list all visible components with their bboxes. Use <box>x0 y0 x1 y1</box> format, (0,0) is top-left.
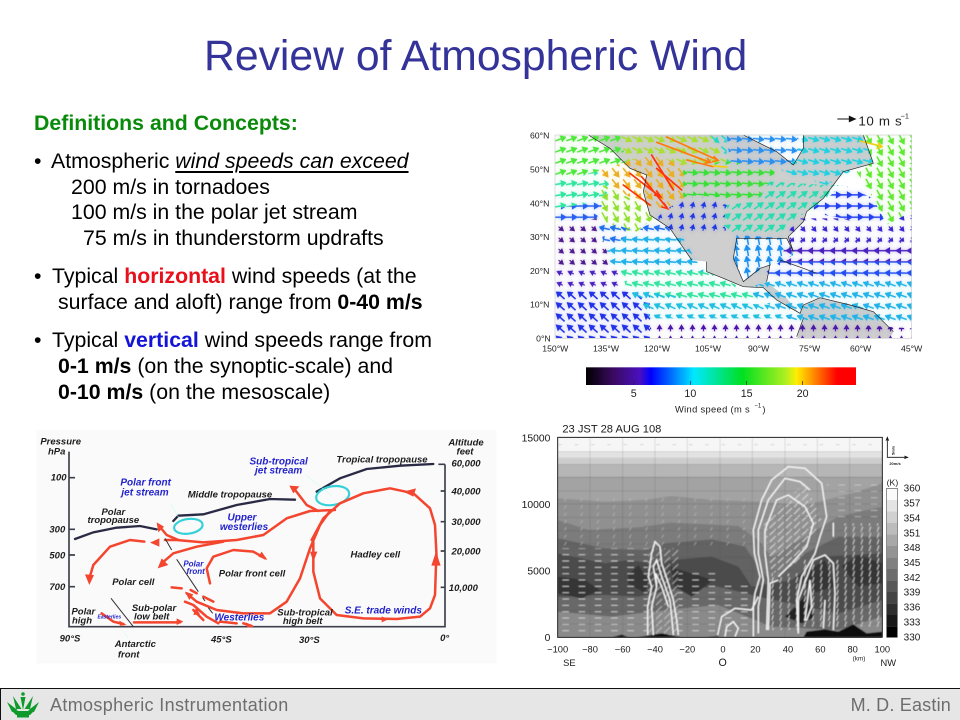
heading: definitions: Definitions and Concepts: <box>34 111 298 135</box>
bullet: vertical wind: Typical vertical wind speeds range from <box>52 328 432 352</box>
blue labels: Sub-tropical <box>249 457 308 468</box>
bullet: horizontal wind: Typical horizontal wind speeds (at the <box>52 264 417 288</box>
tropopause lines <box>75 464 433 539</box>
longitude labels: 135°W <box>593 344 620 354</box>
black labels: Polar cell <box>112 577 155 588</box>
x axis labels: NW <box>881 658 896 668</box>
colour wash under the vectors <box>555 135 912 338</box>
footer bar <box>0 688 960 720</box>
colour bar: wind speed: Wind speed (m s <box>675 404 750 414</box>
text block: definitions and concepts <box>34 111 432 404</box>
black labels: low belt <box>134 611 170 622</box>
latitude labels: 10°N <box>530 300 549 310</box>
x axis labels: 100 <box>875 645 890 655</box>
x axis labels <box>547 645 896 669</box>
bullet: vertical wind: • <box>34 328 41 352</box>
black labels: 100 <box>51 473 67 484</box>
colour bar: wind speed: 10 <box>684 388 696 400</box>
temperature colour scale: 345 <box>904 558 921 569</box>
colour bar: wind speed: 5 <box>631 388 637 400</box>
longitude labels <box>542 344 923 354</box>
temperature colour scale <box>887 477 921 644</box>
vector scale key: 5m/s <box>890 445 895 455</box>
temperature colour scale: 360 <box>904 483 921 494</box>
strong wind arrows <box>623 137 882 209</box>
vector field <box>555 135 912 338</box>
darkest blobs <box>558 555 882 623</box>
front lines <box>111 538 213 627</box>
black labels: 10,000 <box>449 583 479 594</box>
latitude labels: 20°N <box>530 266 549 276</box>
colour bar: wind speed: 15 <box>741 388 753 400</box>
temperature colour scale: 339 <box>904 588 921 599</box>
black labels: 0° <box>440 633 449 644</box>
bullet: wind speeds can exceed: • <box>34 149 41 173</box>
blue labels: Easterlies <box>98 615 121 621</box>
black labels: Polar front cell <box>219 569 286 580</box>
vector scale key <box>886 437 908 466</box>
x axis labels: −100 <box>547 645 568 655</box>
latitude labels: 60°N <box>530 130 549 140</box>
black labels: Altitude <box>447 437 484 448</box>
shaded potential temperature <box>558 437 882 638</box>
black labels: Hadley cell <box>351 550 401 561</box>
wind vectors <box>558 445 882 636</box>
circulation arrows <box>89 488 437 626</box>
longitude labels: 105°W <box>695 344 722 354</box>
y axis labels <box>522 433 551 644</box>
line: horizontal range: surface and aloft) range from 0-40 m/s <box>58 290 423 314</box>
colour bar: wind speed: −1 <box>754 404 762 410</box>
black labels: 30°S <box>299 635 320 646</box>
latitude labels: 0°N <box>536 334 551 344</box>
axes <box>69 452 445 627</box>
reference arrow: 10 m/s: 10 m s <box>858 114 902 129</box>
black labels: 300 <box>49 524 66 535</box>
blue labels <box>98 457 422 624</box>
black labels: Sub-polar <box>132 603 177 614</box>
longitude labels: 120°W <box>644 344 671 354</box>
chart: wind vector map <box>530 111 923 414</box>
x axis labels: −20 <box>679 645 695 655</box>
longitude labels: 45°W <box>901 344 923 354</box>
black labels: feet <box>457 446 474 457</box>
lower lighter layers <box>558 586 882 630</box>
blue labels: westerlies <box>220 522 269 533</box>
blue labels: jet stream <box>119 488 169 499</box>
black labels: Polar <box>71 606 97 617</box>
map plot <box>555 135 912 338</box>
blue labels: Upper <box>228 513 258 524</box>
black labels: Middle tropopause <box>188 490 273 501</box>
jet stream ovals <box>173 484 351 536</box>
temperature colour scale: 330 <box>904 633 921 644</box>
blue labels: Polar <box>183 560 204 569</box>
black labels: front <box>118 649 140 660</box>
temperature colour scale: 354 <box>904 513 921 524</box>
y axis labels: 0 <box>545 633 551 644</box>
black labels: Pressure <box>40 437 82 448</box>
longitude labels: 150°W <box>542 344 569 354</box>
temperature colour scale: (K) <box>887 477 898 487</box>
black labels <box>40 437 484 660</box>
x axis labels: 40 <box>783 645 793 655</box>
blue labels: Polar front <box>120 478 172 489</box>
coastlines <box>588 135 893 337</box>
black labels: 45°S <box>210 634 232 645</box>
icon: green lotus logo <box>7 692 39 718</box>
title: Review of Atmospheric Wind <box>204 32 747 80</box>
black labels: 30,000 <box>451 517 481 528</box>
temperature colour scale: 351 <box>904 528 921 539</box>
black labels: Tropical tropopause <box>336 455 428 466</box>
chart: vertical cross-section of storm <box>522 424 921 669</box>
line: thunderstorm updrafts: 75 m/s in thunderstorm updrafts <box>83 226 384 250</box>
black labels: 90°S <box>60 634 81 645</box>
temperature colour scale: 357 <box>904 498 921 509</box>
blue labels: S.E. trade winds <box>345 605 422 616</box>
black labels: Polar <box>101 507 127 518</box>
black labels: 60,000 <box>451 459 481 470</box>
longitude labels: 75°W <box>799 344 821 354</box>
reference arrow: 10 m/s: −1 <box>901 111 909 120</box>
black labels: 700 <box>49 582 66 593</box>
frame <box>558 437 882 637</box>
panel background <box>37 430 497 663</box>
vector scale key: 20m/s <box>889 461 901 466</box>
chart time label: 23 JST 28 AUG 108 <box>562 424 661 436</box>
footer course name: Atmospheric Instrumentation <box>50 695 289 715</box>
line: polar jet: 100 m/s in the polar jet stream <box>71 200 357 224</box>
x axis labels: −60 <box>615 645 631 655</box>
black labels: tropopause <box>87 515 140 526</box>
reflectivity contours <box>648 467 835 637</box>
temperature colour scale: 348 <box>904 543 921 554</box>
colour bar: wind speed <box>586 367 856 414</box>
black labels: Sub-tropical <box>277 607 333 618</box>
y axis labels: 5000 <box>527 567 551 578</box>
reference arrow: 10 m/s <box>837 111 909 129</box>
latitude labels: 50°N <box>530 164 549 174</box>
grid lines <box>558 437 882 637</box>
land masses <box>588 135 893 338</box>
x axis labels: 0 <box>720 645 726 655</box>
longitude labels: 60°W <box>850 344 872 354</box>
blue labels: Westerlies <box>214 613 265 624</box>
temperature colour scale: 342 <box>904 573 921 584</box>
black labels: 20,000 <box>450 547 481 558</box>
arrow heads <box>85 486 441 628</box>
black labels: high <box>72 615 92 626</box>
blue labels: jet stream <box>253 466 302 477</box>
x axis labels: SE <box>563 658 576 668</box>
black labels: high belt <box>283 616 323 627</box>
x axis labels: −80 <box>582 645 598 655</box>
black labels: hPa <box>48 446 65 457</box>
x axis labels: 20 <box>750 645 761 655</box>
bullet: horizontal wind: • <box>34 264 41 288</box>
footer author: M. D. Eastin <box>851 695 951 715</box>
x axis labels: −40 <box>647 645 663 655</box>
latitude labels <box>530 130 551 344</box>
y axis labels: 10000 <box>522 500 551 511</box>
latitude labels: 40°N <box>530 198 549 208</box>
latitude labels: 30°N <box>530 232 549 242</box>
bullet: wind speeds can exceed: Atmospheric wind speeds can exceed <box>51 149 409 173</box>
longitude labels: 90°W <box>748 344 770 354</box>
temperature colour scale: 333 <box>904 618 921 629</box>
colour bar: wind speed: ) <box>762 404 765 414</box>
colour bar: wind speed: 20 <box>797 388 809 400</box>
black labels: 500 <box>49 550 66 561</box>
x axis labels: 80 <box>847 645 858 655</box>
temperature colour scale: 336 <box>904 603 921 614</box>
line: synoptic: 0-1 m/s (on the synoptic-scale) and <box>58 354 393 378</box>
terrain <box>612 624 882 637</box>
y axis labels: 15000 <box>522 433 551 444</box>
x axis labels: 60 <box>815 645 826 655</box>
x axis labels: (km) <box>853 656 865 663</box>
plot border <box>555 135 912 338</box>
chart: general circulation cross-section <box>40 437 484 660</box>
black labels: 40,000 <box>450 486 481 497</box>
black labels: Antarctic <box>114 639 157 650</box>
line: mesoscale: 0-10 m/s (on the mesoscale) <box>58 380 330 404</box>
x axis labels: O <box>719 657 727 669</box>
blue labels: front <box>187 567 205 576</box>
line: tornadoes: 200 m/s in tornadoes <box>71 175 270 199</box>
